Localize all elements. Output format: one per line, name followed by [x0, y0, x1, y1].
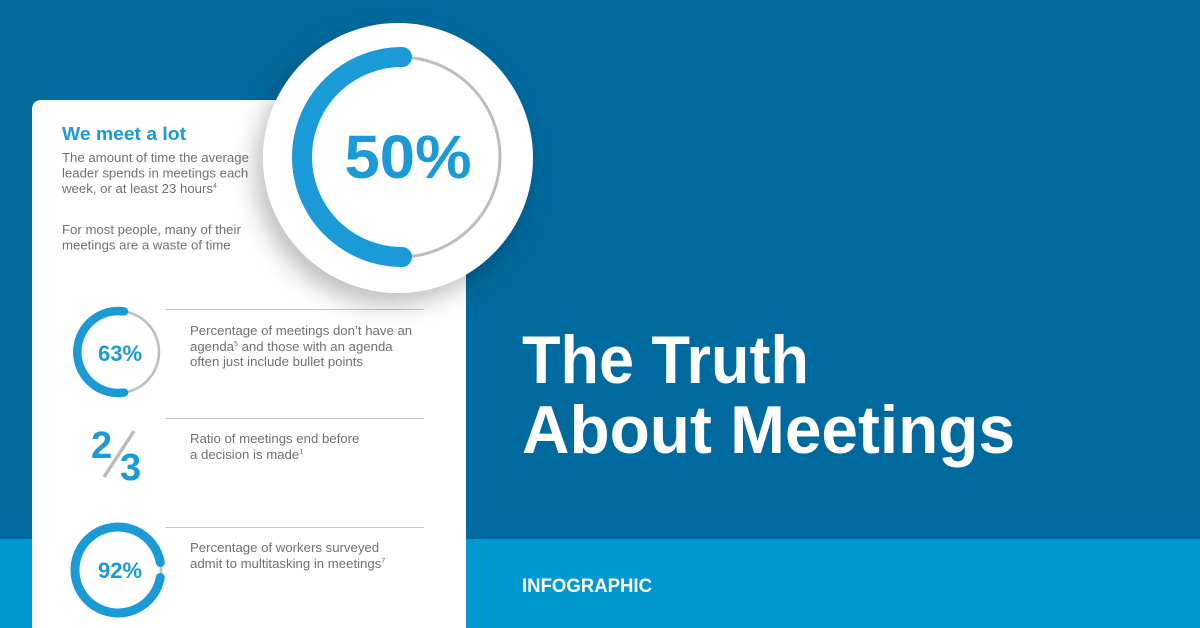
text block: meeting hours: The amount of time the average [62, 150, 249, 165]
text block: multitasking: Percentage of workers surveyed [190, 540, 379, 555]
panel: stats card [32, 100, 466, 628]
text block: agenda: often just include bullet points [190, 354, 363, 369]
text block: multitasking: 7 [381, 558, 385, 565]
text block: agenda: 5 [234, 341, 238, 348]
chart: 92% ring [75, 527, 161, 613]
text block: waste of time: meetings are a waste of time [62, 238, 231, 252]
icon: two thirds fraction: 2 [91, 425, 112, 467]
heading: we meet a lot: We meet a lot [62, 123, 186, 144]
chart: 50% big ring: 50% [344, 123, 472, 191]
text block: meeting hours: leader spends in meetings each [62, 166, 248, 180]
title [522, 322, 1015, 468]
icon: two thirds fraction: 3 [120, 447, 141, 489]
background band bottom [0, 539, 1200, 628]
text block: meeting hours: week, or at least 23 hours [61, 181, 217, 196]
text block: agenda: agenda [190, 339, 393, 354]
text block: ratio: Ratio of meetings end before [190, 431, 359, 446]
text block: agenda: and those with an agenda [238, 339, 393, 354]
title: About Meetings [522, 392, 1015, 468]
text block: ratio: a decision is made [190, 447, 303, 462]
text block: multitasking: admit to multitasking in meetings [190, 556, 385, 571]
label: infographic: INFOGRAPHIC [522, 576, 652, 597]
text block: waste of time: For most people, many of their [62, 222, 241, 237]
icon: two thirds fraction [91, 425, 141, 489]
text block: meeting hours: 4 [213, 183, 217, 190]
chart: 63% ring: 63% [98, 341, 142, 366]
title: The Truth [522, 322, 809, 398]
chart: 63% ring [77, 311, 159, 393]
text block: agenda: Percentage of meetings don’t have an [190, 323, 412, 338]
chart: 50% big ring [263, 23, 533, 293]
text block: ratio: 1 [299, 449, 303, 456]
chart: 92% ring: 92% [98, 558, 142, 583]
